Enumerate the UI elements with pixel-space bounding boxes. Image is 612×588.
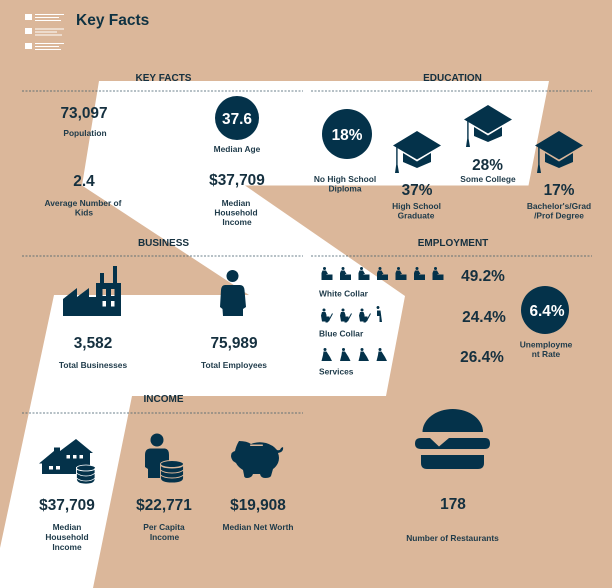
stat: average number of kids: 2.4	[73, 173, 95, 190]
stat: median household income: $37,709	[209, 172, 265, 189]
stat: average number of kids: Kids	[75, 208, 93, 218]
heading: key facts: KEY FACTS	[136, 73, 192, 84]
stat: total businesses: 3,582	[74, 335, 112, 352]
stat: total employees: 75,989	[210, 335, 258, 352]
stat: median household income: $37,709	[39, 497, 95, 514]
stat: number of restaurants: 178	[440, 496, 466, 513]
stat: unemployment rate: Unemployme	[520, 340, 573, 350]
stat: no high school diploma: Diploma	[328, 184, 362, 194]
stat: median age: 37.6	[222, 111, 252, 128]
stat: number of restaurants	[406, 496, 499, 543]
stat: median household income: Income	[222, 217, 252, 227]
icons: white collar	[322, 267, 444, 280]
stat: median household income: Household	[214, 208, 258, 218]
stat: bachelor's degree: 17%	[544, 182, 575, 199]
stat: total employees: Total Employees	[201, 360, 267, 370]
stat: median household income: Household	[45, 532, 89, 542]
stat: average number of kids: Average Number of	[45, 198, 122, 208]
icon: factory	[63, 266, 121, 316]
stat: median household income	[39, 497, 95, 552]
stat: median household income	[209, 172, 265, 227]
stat: per capita income: Per Capita	[143, 522, 185, 532]
stat: population	[60, 105, 108, 138]
stat: unemployment rate: 6.4%	[529, 303, 565, 320]
icons: services	[322, 348, 387, 361]
stat: no high school diploma	[314, 109, 376, 194]
panel: restaurants	[406, 409, 499, 543]
stat: unemployment rate: nt Rate	[532, 349, 561, 359]
label: services: Services	[319, 366, 354, 376]
stat: blue collar percent: 24.4%	[462, 309, 506, 326]
stat: median age: Median Age	[214, 144, 261, 154]
stat: some college: 28%	[472, 157, 503, 174]
stat: median age	[214, 96, 261, 154]
panel: income	[39, 394, 294, 552]
stat: median net worth: $19,908	[230, 497, 286, 514]
panel: business	[59, 238, 267, 370]
stat: total businesses: Total Businesses	[59, 360, 127, 370]
icon: person	[220, 270, 246, 316]
stat: bachelor's degree: Bachelor's/Grad	[527, 201, 591, 211]
stat: total businesses	[59, 335, 127, 370]
stat: some college: Some College	[460, 174, 516, 184]
icon: person and coins	[145, 434, 184, 483]
icons: blue collar	[321, 306, 382, 322]
stat: no high school diploma: No High School	[314, 174, 376, 184]
stat: unemployment rate	[520, 286, 573, 359]
stat: high school graduate: High School	[392, 201, 441, 211]
white zigzag band	[0, 81, 549, 588]
stat: population: 73,097	[60, 105, 108, 122]
stat: no high school diploma: 18%	[332, 127, 363, 144]
icon: burger	[415, 409, 490, 469]
stat: services percent: 26.4%	[460, 349, 504, 366]
label: blue collar: Blue Collar	[319, 328, 364, 338]
icon: graduation cap bachelor	[535, 131, 583, 173]
stat: median net worth: Median Net Worth	[222, 522, 294, 532]
heading: employment: EMPLOYMENT	[418, 238, 488, 249]
stat: median household income: Median	[53, 522, 81, 532]
icon: list	[25, 14, 64, 50]
section dividers	[22, 91, 592, 413]
stat: high school graduate: Graduate	[398, 210, 435, 220]
stat: bachelor's degree: /Prof Degree	[534, 210, 584, 220]
stat: high school graduate	[392, 182, 441, 220]
stat: average number of kids	[45, 173, 122, 218]
heading: business: BUSINESS	[138, 238, 189, 249]
label: white collar: White Collar	[319, 288, 369, 298]
stat: per capita income: Income	[150, 532, 179, 542]
panel: education	[314, 73, 591, 220]
icon: houses and coins	[39, 439, 96, 484]
panel: employment	[319, 238, 573, 376]
stat: some college	[460, 157, 516, 184]
heading: education: EDUCATION	[423, 73, 482, 84]
heading: income: INCOME	[144, 394, 184, 405]
panel: key facts	[45, 73, 265, 227]
stat: median household income: Median	[222, 198, 250, 208]
icon: graduation cap some college	[464, 105, 512, 147]
stat: high school graduate: 37%	[402, 182, 433, 199]
icon: graduation cap high school	[393, 131, 441, 173]
stat: per capita income: $22,771	[136, 497, 192, 514]
stat: population: Population	[63, 128, 107, 138]
stat: total employees	[201, 335, 267, 370]
stat: white collar percent: 49.2%	[461, 268, 505, 285]
title: Key Facts	[76, 12, 149, 29]
stat: number of restaurants: Number of Restaurants	[406, 533, 499, 543]
icon: piggy bank	[231, 441, 283, 478]
stat: median household income: Income	[52, 542, 82, 552]
stat: per capita income	[136, 497, 192, 542]
stat: bachelor's degree	[527, 182, 591, 220]
stat: median net worth	[222, 497, 294, 532]
